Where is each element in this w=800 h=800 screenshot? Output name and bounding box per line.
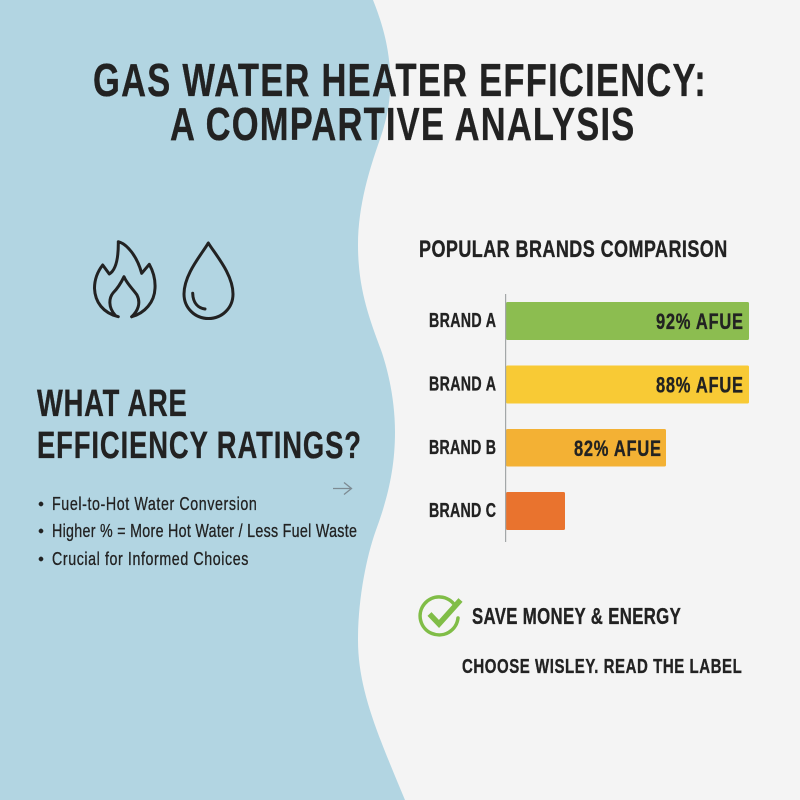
icon: green check [420,597,460,635]
icon: flame [94,242,155,317]
bullet list: Higher % = More Hot Water / Less Fuel Waste [52,521,357,541]
bar: brand A 88% [429,366,749,404]
bar: brand B 82%: BRAND B [429,436,496,459]
bar: brand A 92%: BRAND A [429,309,496,332]
callout: choose wisely: CHOOSE WISLEY. READ THE LABEL [462,655,742,678]
title: GAS WATER HEATER EFFICIENCY: [93,54,706,106]
bar: brand A 88%: BRAND A [429,372,496,395]
bar: brand A 92%: 92% AFUE [656,310,743,335]
bullet list: Fuel-to-Hot Water Conversion [52,494,257,514]
heading: what are efficiency ratings: EFFICIENCY RATINGS? [37,425,361,467]
bar: brand B 82%: 82% AFUE [574,437,661,462]
bullet list [39,494,357,569]
chart axis [505,294,506,542]
bar: brand A 92% [429,302,749,340]
icon: arrow [333,482,352,494]
panel: blue wave background [0,0,405,800]
callout: save money and energy: SAVE MONEY & ENERGY [472,605,681,630]
heading: what are efficiency ratings [37,383,361,467]
bar chart [429,294,749,542]
bar: brand C [429,492,565,530]
bar: brand A 88%: 88% AFUE [656,373,743,398]
title: A COMPARTIVE ANALYSIS [170,98,634,150]
heading: popular brands comparison: POPULAR BRANDS COMPARISON [419,237,727,263]
bar: brand B 82% [429,429,666,466]
bullet list: Crucial for Informed Choices [52,549,248,569]
heading: what are efficiency ratings: WHAT ARE [37,383,187,425]
bar: brand C: BRAND C [429,499,496,522]
icon: water drop [184,243,233,318]
title [93,54,706,150]
